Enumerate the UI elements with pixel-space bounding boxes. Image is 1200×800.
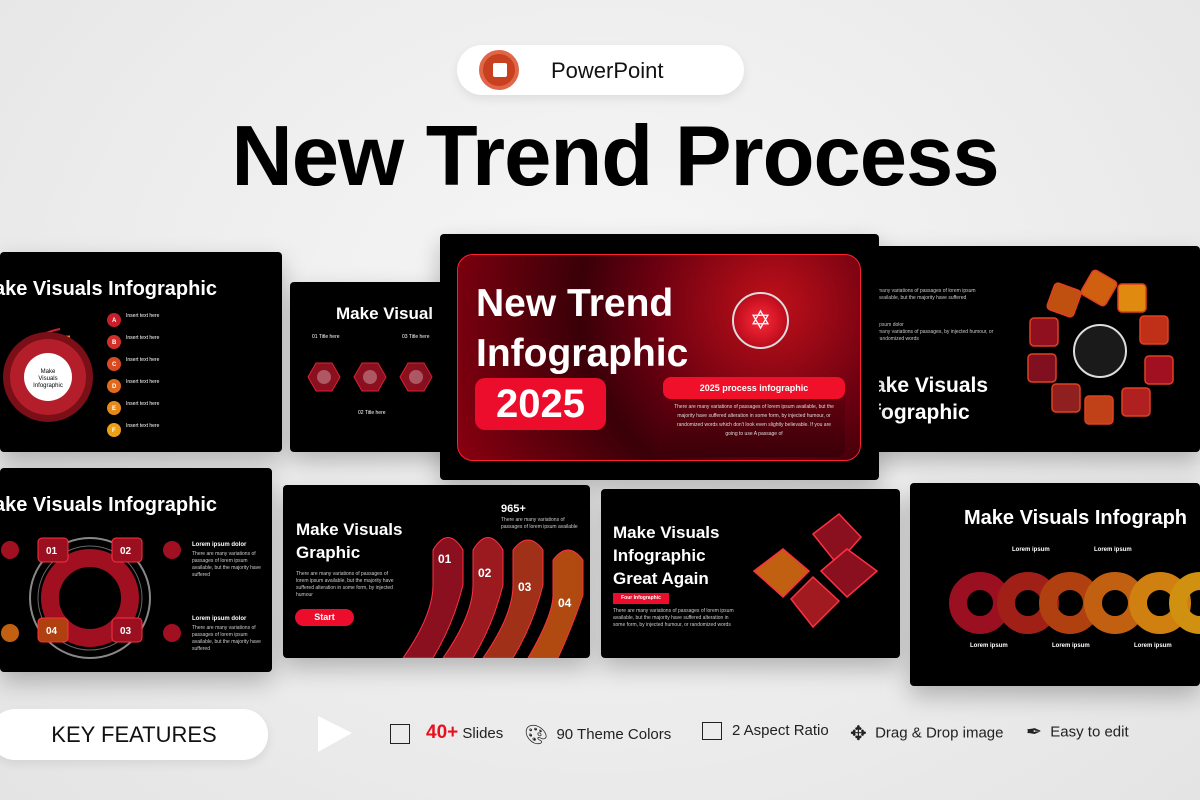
slide: make visuals infographic (top left): A xyxy=(112,318,117,324)
slide: make visuals graphic 01-04: 965+ xyxy=(501,503,526,515)
slide: make visuals infographic (top left): Insert text here xyxy=(126,357,160,363)
features row xyxy=(390,722,1129,746)
slide: make visual hexagons: 03 Title here xyxy=(402,334,430,340)
hero heading: New Trend xyxy=(476,282,673,325)
slide: make visuals infographic (top left): Make xyxy=(41,369,56,375)
slide: make visual hexagons: 01 Title here xyxy=(312,334,340,340)
slide: make visuals graphic 01-04: 01 xyxy=(438,552,452,566)
slide: make visuals infographic (top left): Insert text here xyxy=(126,313,160,319)
hero heading xyxy=(476,282,688,375)
slide: make visuals infographic (top left): Visuals xyxy=(38,376,58,382)
feature: theme colors: 🎨︎ 90 Theme Colors xyxy=(524,725,671,746)
feature: drag & drop: ✥ Drag & Drop image xyxy=(850,723,1004,745)
slide: circle 01-04 (bottom left): 03 xyxy=(120,626,132,637)
slide: make visuals infographic (top left): B xyxy=(112,340,117,346)
key features pill: KEY FEATURES xyxy=(51,722,217,747)
badge: 2025: 2025 xyxy=(496,382,585,426)
slide: circle 01-04 (bottom left): ake Visuals Infographic xyxy=(0,494,217,516)
key features pill xyxy=(0,709,268,760)
slide: make visuals great again: Great Again xyxy=(613,569,709,588)
slide: make visuals infographic (top right): ake Visuals xyxy=(874,374,988,397)
slide: make visuals graphic 01-04: Graphic xyxy=(296,543,360,562)
slide: make visuals great again: Infographic xyxy=(613,546,706,565)
slide: make visuals great again: Four Infographic xyxy=(621,595,661,601)
feature: slides: 40+ Slides xyxy=(426,722,503,743)
slide: make visuals infographic (top right): many variations of passages of lorem ipsum available, but the majority have suffered xyxy=(878,288,976,301)
slide: make visuals great again xyxy=(601,489,900,658)
badge: 2025 xyxy=(475,378,606,430)
slide: circle 01-04 (bottom left): Lorem ipsum dolor xyxy=(192,542,246,548)
callout: process infographic: 2025 process infographic xyxy=(700,383,808,393)
slide: make visuals infographic (top left): E xyxy=(112,406,116,412)
header label: PowerPoint xyxy=(551,58,664,83)
slide: make visuals infograph (bottom right): Make Visuals Infograph xyxy=(964,507,1187,529)
slide: make visuals infographic (top left): Insert text here xyxy=(126,379,160,385)
slide: make visuals infograph (bottom right) xyxy=(910,483,1200,686)
slide: make visuals infographic (top left): Insert text here xyxy=(126,335,160,341)
slide: make visuals infograph (bottom right): Lorem ipsum xyxy=(970,643,1008,649)
feature: slides xyxy=(390,722,503,744)
slide: make visuals infograph (bottom right): Lorem ipsum xyxy=(1134,643,1172,649)
slide: make visuals graphic 01-04: 04 xyxy=(558,596,572,610)
slide: make visuals infographic (top left): Insert text here xyxy=(126,401,160,407)
slide: make visuals graphic 01-04: Make Visuals xyxy=(296,520,402,539)
icon: powerpoint logo xyxy=(479,50,519,90)
slide: make visuals infographic (top left): Infographic xyxy=(33,383,63,389)
slide: circle 01-04 (bottom left): There are many variations of passages of lorem ipsum available, but the majority have suffered xyxy=(192,625,261,652)
slide: make visuals infograph (bottom right): Lorem ipsum xyxy=(1094,547,1132,553)
slide: circle 01-04 (bottom left): 04 xyxy=(46,626,58,637)
slide: circle 01-04 (bottom left) xyxy=(0,468,272,672)
slide: make visuals infographic (top left): ake Visuals Infographic xyxy=(0,278,217,300)
slide: circle 01-04 (bottom left): There are many variations of passages of lorem ipsum available, but the majority have suffered xyxy=(192,551,261,578)
callout: process infographic: There are many variations of passages of lorem ipsum available, but the majority have suffered alteration in some form, by injected humour, or randomized words which don't look even slightly believable. If you are going to use A passage of xyxy=(674,404,834,437)
slide: make visuals great again: There are many variations of passages of lorem ipsum available, but the majority have suffered alteration in some form, by injected humour, or randomized words xyxy=(613,608,734,628)
arrow: play triangle xyxy=(318,716,352,752)
slide: make visual hexagons: Make Visual xyxy=(336,304,433,323)
slide: center hero New Trend Infographic xyxy=(440,234,879,480)
slide: make visuals graphic 01-04: There are many variations of passages of lorem ipsum available, but the majority have suffered alteration in some form, by injected humour xyxy=(296,571,394,598)
slide: make visuals great again: Make Visuals xyxy=(613,523,719,542)
icon: network star: ✡ xyxy=(750,305,771,335)
slide: make visuals infographic (top right) xyxy=(870,246,1200,452)
slide: make visuals infographic (top right): fographic xyxy=(874,401,970,424)
feature: aspect ratio: 2 Aspect Ratio xyxy=(732,722,829,739)
slide: make visuals graphic 01-04: There are many variations of passages of lorem ipsum available xyxy=(501,517,578,530)
slide: make visuals infographic (top left): F xyxy=(112,428,116,434)
slide: circle 01-04 (bottom left): 01 xyxy=(46,546,58,557)
callout: process infographic xyxy=(663,377,845,457)
slide: make visual hexagons xyxy=(290,282,460,452)
slide: make visuals graphic 01-04 xyxy=(283,485,590,658)
hero heading: Infographic xyxy=(476,332,688,375)
title: New Trend Process xyxy=(231,109,999,204)
feature: easy to edit: ✒ Easy to edit xyxy=(1026,722,1129,743)
slide: make visuals infographic (top left) xyxy=(0,252,282,452)
slide: circle 01-04 (bottom left): 02 xyxy=(120,546,132,557)
header pill: PowerPoint xyxy=(457,45,744,95)
button: Start xyxy=(295,609,354,626)
slide: make visuals infographic (top right): ipsum dolor xyxy=(878,322,904,328)
slide: make visuals infographic (top left): Insert text here xyxy=(126,423,160,429)
slide: make visuals graphic 01-04: 03 xyxy=(518,580,532,594)
slide: make visuals infograph (bottom right): Lorem ipsum xyxy=(1012,547,1050,553)
slide: make visuals infographic (top right): many variations of passages, by injected humour, or randomized words xyxy=(878,329,993,342)
slide: make visuals infograph (bottom right): Lorem ipsum xyxy=(1052,643,1090,649)
slide: make visuals infographic (top left): C xyxy=(112,362,117,368)
icon: network star xyxy=(732,292,789,349)
slide: make visuals graphic 01-04: 02 xyxy=(478,566,492,580)
slide: circle 01-04 (bottom left): Lorem ipsum dolor xyxy=(192,616,246,622)
slide: make visual hexagons: 02 Title here xyxy=(358,410,386,416)
slide: make visuals infographic (top left): D xyxy=(112,384,117,390)
button: Start: Start xyxy=(314,612,335,622)
